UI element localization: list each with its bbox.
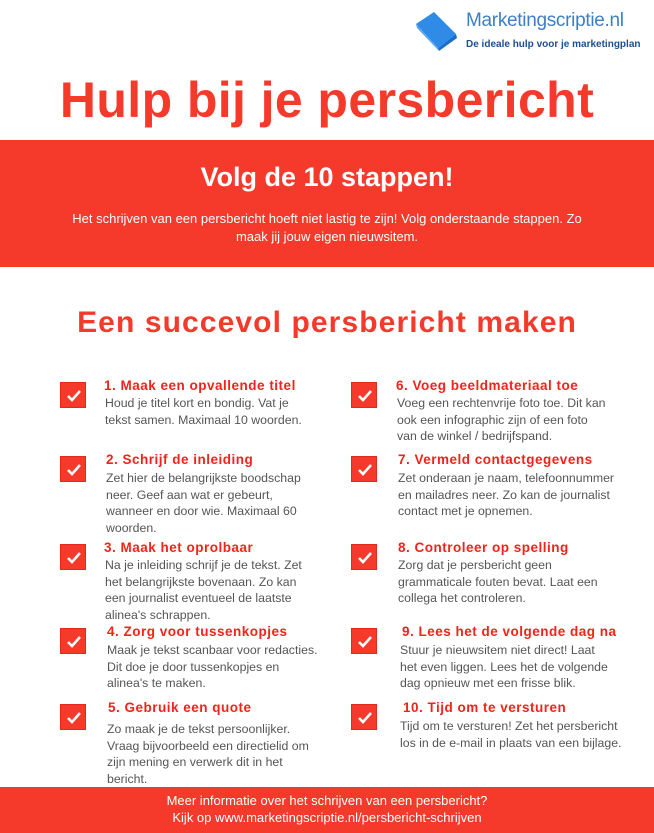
step 5: Zo maak je de tekst persoonlijker. [107, 722, 290, 736]
step 7: 7. Vermeld contactgegevens [398, 452, 593, 467]
step 10: los in de e-mail in plaats van een bijlage. [400, 736, 621, 750]
step 3: het belangrijkste bovenaan. Zo kan [105, 574, 296, 588]
step 10: Tijd om te versturen! Zet het persbericht [400, 719, 618, 733]
title: Hulp bij je persbericht [60, 72, 594, 128]
step 8: grammaticale fouten bevat. Laat een [398, 574, 598, 588]
step 2: neer. Geef aan wat er gebeurt, [106, 488, 273, 502]
text: bericht. [107, 772, 147, 786]
step 5: Vraag bijvoorbeeld een directielid om [107, 738, 309, 752]
step 6: ook een infographic zijn of een foto [397, 412, 588, 426]
logo: De ideale hulp voor je marketingplan [466, 39, 640, 50]
step 2: wanneer en door wie. Maximaal 60 [106, 504, 297, 518]
step 10 [351, 700, 621, 750]
step 7: en mailadres neer. Zo kan de journalist [398, 488, 610, 502]
intro text: Het schrijven van een persbericht hoeft niet lastig te zijn! Volg onderstaande stappen. Zo maak jij jouw eigen nieuwsitem. [72, 211, 582, 244]
step 5: 5. Gebruik een quote [108, 700, 252, 715]
step 3: 3. Maak het oprolbaar [104, 540, 253, 555]
step 5: zijn mening en verwerk dit in het [107, 755, 283, 769]
step 6: 6. Voeg beeldmateriaal toe [396, 378, 578, 393]
step 8 [351, 540, 598, 605]
step 8: Zorg dat je persbericht geen [398, 558, 552, 572]
step 7 [351, 452, 614, 518]
step 4: 4. Zorg voor tussenkopjes [107, 624, 288, 639]
step 4: Maak je tekst scanbaar voor redacties. [107, 643, 318, 657]
logo: Marketingscriptie.nl [466, 10, 624, 31]
footer [0, 787, 654, 833]
step 3 [60, 540, 302, 622]
step 1: tekst samen. Maximaal 10 woorden. [105, 412, 302, 426]
step 4: alinea's te maken. [107, 676, 206, 690]
step 7: Zet onderaan je naam, telefoonnummer [398, 471, 614, 485]
step 6: Voeg een rechtenvrije foto toe. Dit kan [397, 396, 606, 410]
text: woorden. [106, 520, 157, 534]
icon: book [416, 12, 457, 51]
step 8: 8. Controleer op spelling [398, 540, 569, 555]
step 4: Dit doe je door tussenkopjes en [107, 660, 279, 674]
step 2: Zet hier de belangrijkste boodschap [106, 471, 301, 485]
step 7: contact met je opnemen. [398, 504, 533, 518]
step 9: 9. Lees het de volgende dag na [402, 624, 617, 639]
step 4 [60, 624, 318, 690]
step 2 [60, 452, 301, 534]
footer: Kijk op www.marketingscriptie.nl/persbericht-schrijven [172, 810, 482, 825]
step 3: alinea's schrappen. [105, 608, 211, 622]
step 1 [60, 378, 302, 426]
step 9: dag opnieuw met een frisse blik. [400, 676, 576, 690]
logo [416, 10, 640, 51]
step 9 [351, 624, 617, 690]
step 1: 1. Maak een opvallende titel [104, 378, 296, 393]
panel: intro band [0, 140, 654, 267]
section heading: Een succevol persbericht maken [77, 306, 577, 339]
step 5 [60, 700, 309, 786]
step 6: van de winkel / bedrijfspand. [397, 429, 552, 443]
step 10: 10. Tijd om te versturen [403, 700, 566, 715]
step 3: een journalist eventueel de laatste [105, 591, 292, 605]
step 1: Houd je titel kort en bondig. Vat je [105, 396, 289, 410]
step 2: 2. Schrijf de inleiding [106, 452, 253, 467]
step 9: het even liggen. Lees het de volgende [400, 660, 608, 674]
step 6 [351, 378, 606, 443]
footer: Meer informatie over het schrijven van een persbericht? [167, 793, 487, 808]
step 8: collega het controleren. [398, 591, 526, 605]
subtitle: Volg de 10 stappen! [200, 162, 454, 192]
step 3: Na je inleiding schrijf je de tekst. Zet [105, 558, 302, 572]
step 9: Stuur je nieuwsitem niet direct! Laat [400, 643, 595, 657]
